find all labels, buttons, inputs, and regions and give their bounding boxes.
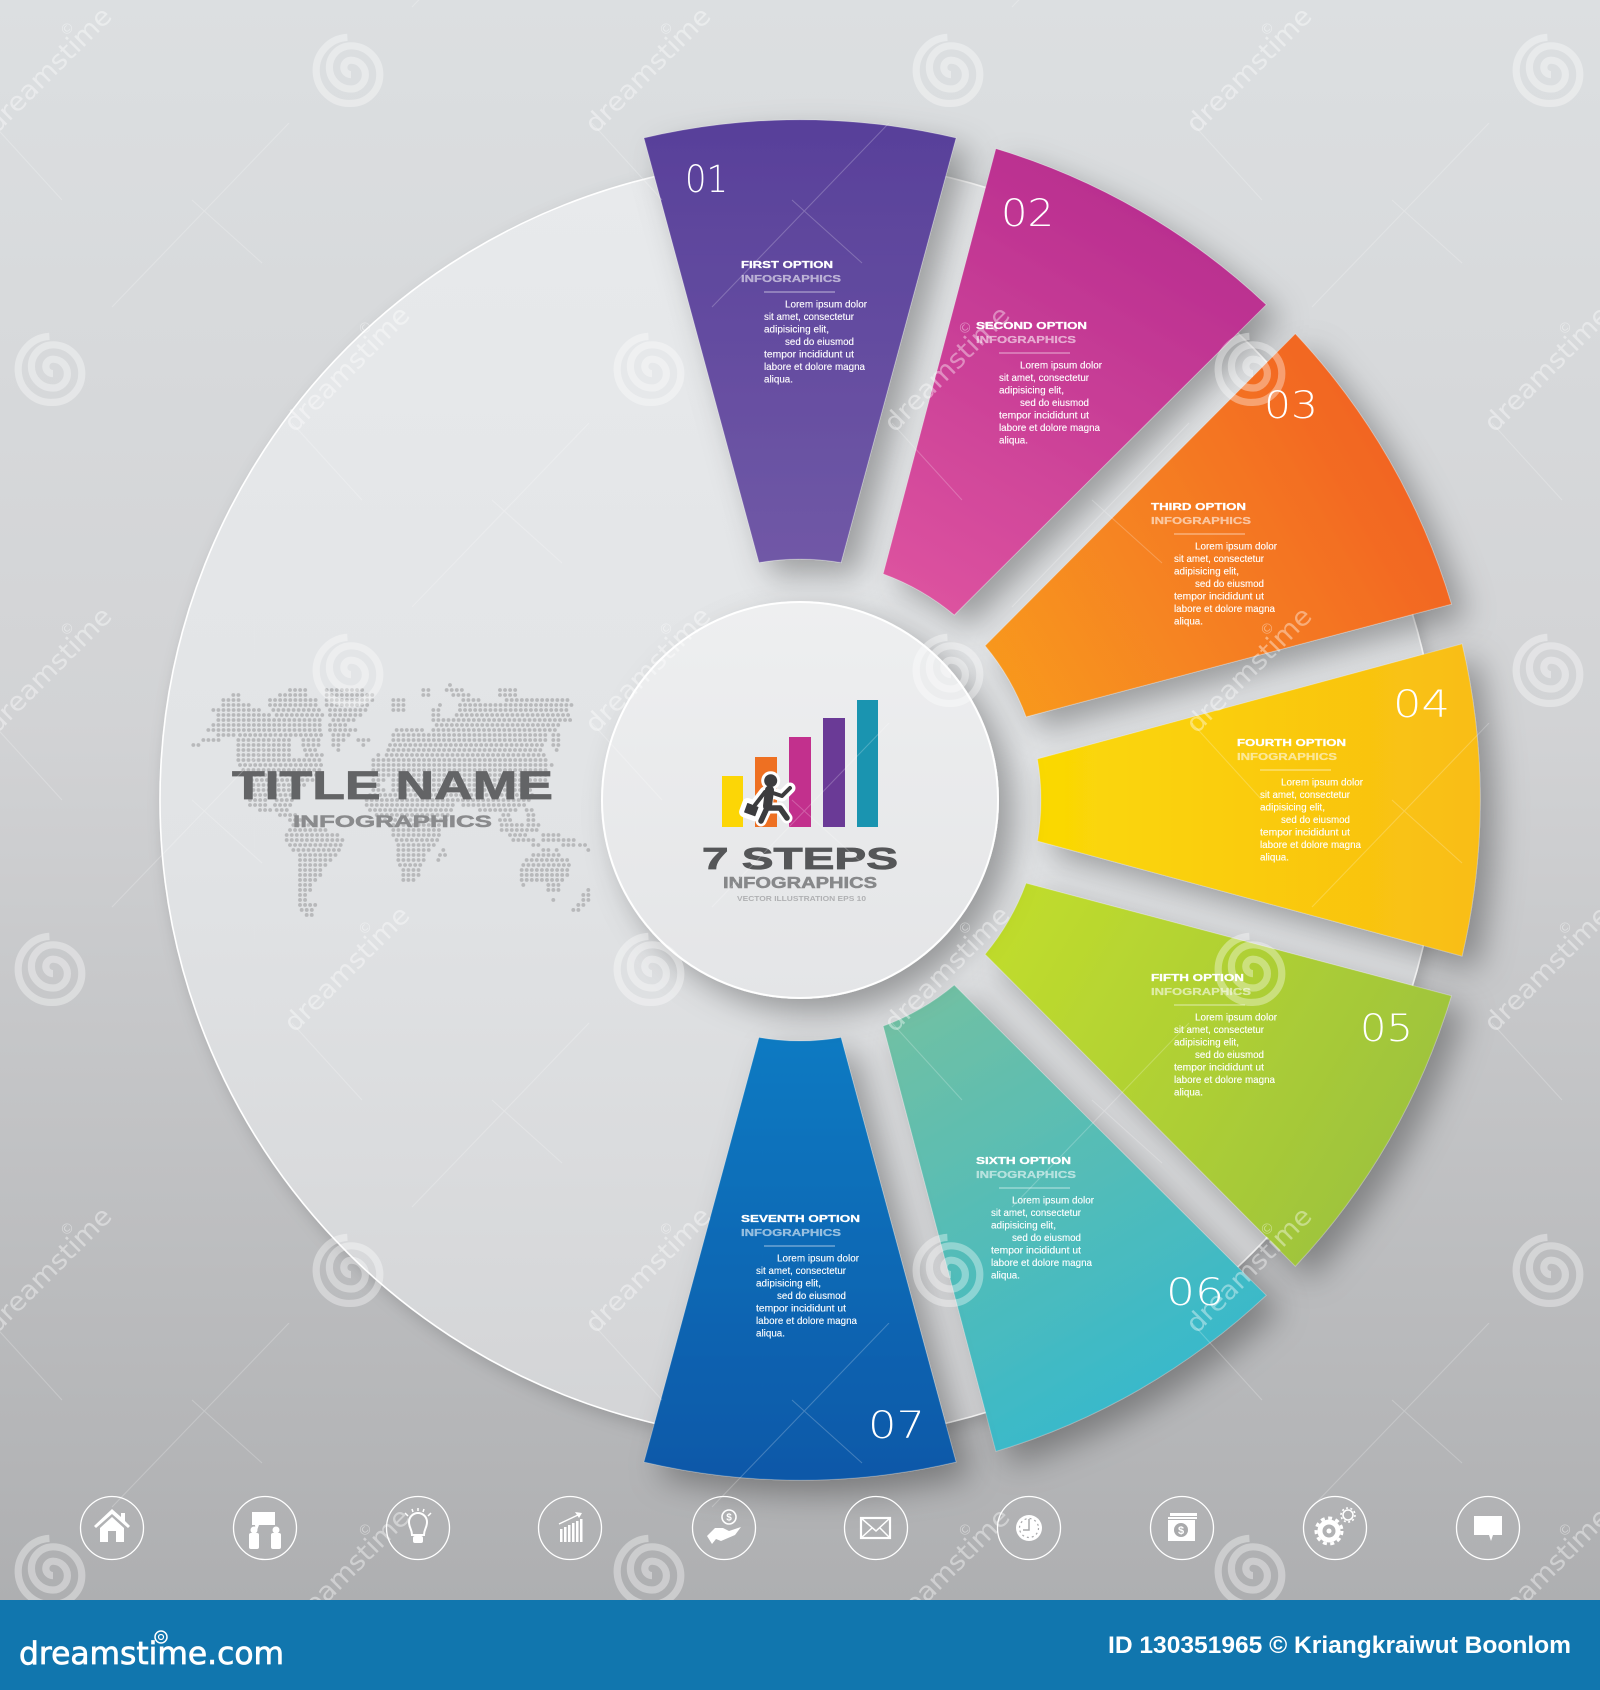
text block: first option: Lorem ipsum dolor xyxy=(785,298,867,310)
watermark overlay: © xyxy=(1555,1520,1576,1541)
footer image id and credit: ID 130351965 © Kriangkraiwut Boonlom xyxy=(1108,1632,1571,1659)
text block: second option: INFOGRAPHICS xyxy=(976,335,1076,346)
number 06: 06 xyxy=(1166,1271,1224,1314)
text block: seventh option xyxy=(741,1214,860,1340)
watermark overlay: dreamstime xyxy=(278,1502,416,1640)
text block: third option xyxy=(1151,502,1277,628)
watermark overlay: dreamstime xyxy=(579,1201,717,1339)
hub heading: 7 STEPS xyxy=(702,841,898,903)
text block: first option: INFOGRAPHICS xyxy=(741,274,841,285)
watermark overlay: © xyxy=(656,19,677,40)
segment 06 shape: teal xyxy=(784,928,1275,1467)
text block: sixth option: Lorem ipsum dolor xyxy=(1012,1194,1094,1206)
text block: sixth option xyxy=(976,1156,1094,1282)
icon: envelope xyxy=(844,1496,908,1560)
text block: first option: aliqua. xyxy=(764,374,793,386)
segment 01 shape: purple xyxy=(644,120,956,562)
text block: third option: adipisicing elit, xyxy=(1174,566,1239,578)
central hub circle xyxy=(602,602,998,998)
title: TITLE NAME xyxy=(232,764,553,831)
segment 03 shape: orange xyxy=(928,325,1467,816)
text block: sixth option: INFOGRAPHICS xyxy=(976,1170,1076,1181)
icon: light bulb xyxy=(386,1496,450,1560)
icon: banknotes: $ xyxy=(1178,1525,1184,1537)
text block: fourth option: sit amet, consectetur xyxy=(1260,789,1350,801)
segment 02 shape: magenta xyxy=(784,133,1275,672)
text block: fourth option xyxy=(1237,738,1363,864)
text block: seventh option: sed do eiusmod xyxy=(777,1290,846,1302)
watermark overlay: dreamstime xyxy=(878,900,1016,1038)
text block: third option: sed do eiusmod xyxy=(1195,578,1264,590)
text block: sixth option: sit amet, consectetur xyxy=(991,1207,1081,1219)
text block: fifth option: labore et dolore magna xyxy=(1174,1074,1275,1086)
watermark overlay: © xyxy=(1257,19,1278,40)
text block: fifth option: sit amet, consectetur xyxy=(1174,1024,1264,1036)
text block: seventh option: aliqua. xyxy=(756,1328,785,1340)
text block: first option: sed do eiusmod xyxy=(785,336,854,348)
watermark overlay: dreamstime xyxy=(1180,601,1318,739)
text block: sixth option: tempor incididunt ut xyxy=(991,1244,1081,1256)
number 02: 02 xyxy=(1001,192,1054,235)
watermark overlay: dreamstime xyxy=(579,1,717,139)
text block: first option: sit amet, consectetur xyxy=(764,311,854,323)
icon: running businessman xyxy=(745,771,790,821)
icon: chat bubble xyxy=(1456,1496,1520,1560)
watermark overlay: © xyxy=(57,1219,78,1240)
text block: second option: adipisicing elit, xyxy=(999,384,1064,396)
footer banner xyxy=(0,1600,1600,1690)
text block: fifth option xyxy=(1151,973,1277,1098)
number 07: 07 xyxy=(868,1404,925,1447)
text block: fifth option: tempor incididunt ut xyxy=(1174,1062,1264,1074)
text block: second option: aliqua. xyxy=(999,434,1028,446)
text block: sixth option: aliqua. xyxy=(991,1270,1020,1282)
text block: third option: tempor incididunt ut xyxy=(1174,590,1264,602)
text block: third option: INFOGRAPHICS xyxy=(1151,516,1251,527)
hub heading: 7 STEPS: INFOGRAPHICS xyxy=(723,875,877,892)
icon: growth chart xyxy=(538,1496,602,1560)
text block: seventh option: adipisicing elit, xyxy=(756,1278,821,1290)
world map: dotted xyxy=(193,685,592,915)
text block: first option: labore et dolore magna xyxy=(764,361,865,373)
text block: fifth option: aliqua. xyxy=(1174,1086,1203,1098)
text block: fifth option: INFOGRAPHICS xyxy=(1151,987,1251,998)
text block: seventh option: sit amet, consectetur xyxy=(756,1265,846,1277)
text block: sixth option: SIXTH OPTION xyxy=(976,1156,1071,1167)
text block: seventh option: SEVENTH OPTION xyxy=(741,1214,860,1225)
number 01: 01 xyxy=(685,158,728,201)
text block: fifth option: sed do eiusmod xyxy=(1195,1049,1264,1061)
watermark overlay: © xyxy=(955,318,976,339)
footer logo text: dreamstime.com xyxy=(19,1636,284,1672)
segment 07 shape: blue xyxy=(644,1038,956,1480)
hub bar chart xyxy=(722,700,878,827)
text block: fourth option: tempor incididunt ut xyxy=(1260,826,1350,838)
watermark overlay: © xyxy=(1555,318,1576,339)
text block: first option xyxy=(741,260,867,386)
icon: gears xyxy=(1304,1496,1366,1560)
text block: sixth option: adipisicing elit, xyxy=(991,1220,1056,1232)
text block: third option: THIRD OPTION xyxy=(1151,502,1246,513)
large background disc xyxy=(160,160,1440,1440)
segment 05 shape: lime xyxy=(928,784,1467,1275)
text block: second option: sed do eiusmod xyxy=(1020,397,1089,409)
icon: home xyxy=(80,1496,144,1560)
text block: seventh option: labore et dolore magna xyxy=(756,1315,857,1327)
text block: fifth option: FIFTH OPTION xyxy=(1151,973,1244,984)
text block: sixth option: labore et dolore magna xyxy=(991,1257,1092,1269)
text block: seventh option: INFOGRAPHICS xyxy=(741,1228,841,1239)
watermark overlay: dreamstime xyxy=(579,601,717,739)
watermark overlay: dreamstime xyxy=(878,300,1016,438)
text block: second option: sit amet, consectetur xyxy=(999,372,1089,384)
text block: first option: adipisicing elit, xyxy=(764,324,829,336)
text block: fifth option: adipisicing elit, xyxy=(1174,1036,1239,1048)
title: TITLE NAME: TITLE NAME xyxy=(232,764,553,808)
text block: third option: Lorem ipsum dolor xyxy=(1195,540,1277,552)
icon: clock xyxy=(998,1496,1060,1560)
text block: fourth option: sed do eiusmod xyxy=(1281,814,1350,826)
watermark overlay: dreamstime xyxy=(1180,1201,1318,1339)
watermark overlay: © xyxy=(656,1219,677,1240)
text block: fifth option: Lorem ipsum dolor xyxy=(1195,1012,1277,1024)
icon row xyxy=(80,1496,1520,1560)
text block: fourth option: Lorem ipsum dolor xyxy=(1281,776,1363,788)
watermark overlay: © xyxy=(355,918,376,939)
text block: first option: tempor incididunt ut xyxy=(764,348,854,360)
text block: sixth option: sed do eiusmod xyxy=(1012,1232,1081,1244)
text block: fourth option: labore et dolore magna xyxy=(1260,839,1361,851)
watermark overlay: © xyxy=(1257,1219,1278,1240)
text block: fourth option: aliqua. xyxy=(1260,852,1289,864)
watermark overlay: © xyxy=(57,619,78,640)
text block: first option: FIRST OPTION xyxy=(741,260,833,271)
icon: meeting people xyxy=(234,1496,296,1560)
hub heading: 7 STEPS: VECTOR ILLUSTRATION EPS 10 xyxy=(737,896,866,903)
watermark overlay: © xyxy=(1555,918,1576,939)
text block: seventh option: Lorem ipsum dolor xyxy=(777,1252,859,1264)
watermark overlay: © xyxy=(355,1520,376,1541)
watermark overlay: dreamstime xyxy=(278,300,416,438)
text block: third option: aliqua. xyxy=(1174,616,1203,628)
segment 04 shape: yellow xyxy=(1038,644,1480,956)
icon: banknotes xyxy=(1150,1496,1214,1560)
text block: second option xyxy=(976,321,1102,446)
text block: fourth option: adipisicing elit, xyxy=(1260,802,1325,814)
number 03: 03 xyxy=(1264,384,1318,427)
text block: fourth option: FOURTH OPTION xyxy=(1237,738,1346,749)
watermark overlay: © xyxy=(57,19,78,40)
number 04: 04 xyxy=(1393,683,1450,726)
watermark overlay: dreamstime xyxy=(1180,1,1318,139)
watermark overlay: © xyxy=(955,1520,976,1541)
watermark overlay: dreamstime xyxy=(278,900,416,1038)
text block: second option: Lorem ipsum dolor xyxy=(1020,360,1102,372)
text block: third option: labore et dolore magna xyxy=(1174,603,1275,615)
text block: second option: tempor incididunt ut xyxy=(999,410,1089,422)
watermark overlay: © xyxy=(656,619,677,640)
text block: fourth option: INFOGRAPHICS xyxy=(1237,752,1337,763)
number 05: 05 xyxy=(1360,1007,1413,1050)
watermark overlay: © xyxy=(355,318,376,339)
text block: third option: sit amet, consectetur xyxy=(1174,553,1264,565)
watermark overlay: © xyxy=(955,918,976,939)
watermark overlay: © xyxy=(1257,619,1278,640)
text block: second option: SECOND OPTION xyxy=(976,321,1087,332)
text block: seventh option: tempor incididunt ut xyxy=(756,1302,846,1314)
icon: hand with coin xyxy=(692,1496,756,1560)
text block: second option: labore et dolore magna xyxy=(999,422,1100,434)
hub heading: 7 STEPS: 7 STEPS xyxy=(702,841,898,876)
icon: hand with coin: $ xyxy=(726,1512,732,1524)
subtitle: INFOGRAPHICS: INFOGRAPHICS xyxy=(293,812,492,831)
watermark overlay: dreamstime xyxy=(878,1502,1016,1640)
